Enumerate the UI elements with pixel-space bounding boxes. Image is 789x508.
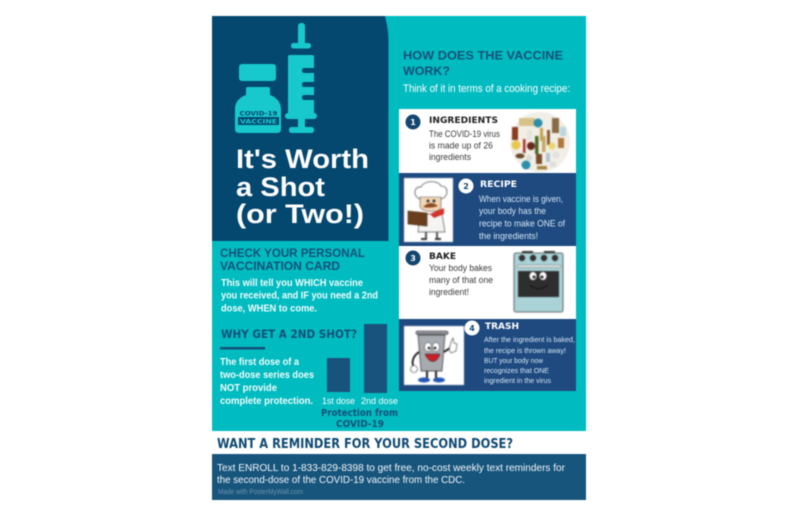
panel: reminder text: Text ENROLL to 1-833-829-8398 to get free, no-cost weekly text reminders for <box>217 462 565 474</box>
step number 1 <box>406 114 420 130</box>
panel: step 3 bake <box>399 246 576 319</box>
bar chart: protection from COVID-19: COVID-19 <box>336 419 384 430</box>
step number 4: 4 <box>469 324 475 333</box>
text block: NOT provide <box>220 382 277 394</box>
icon: vaccine vial: VACCINE <box>240 118 277 126</box>
text block: The first dose of a <box>220 356 299 368</box>
panel: how does the vaccine work heading: Think of it in terms of a cooking recipe: <box>403 83 570 95</box>
panel: step 3 bake: ingredient! <box>429 287 469 297</box>
panel: how does the vaccine work heading: HOW DOES THE VACCINE <box>403 48 563 62</box>
text block: This will tell you WHICH vaccine <box>221 277 363 289</box>
step number 3 <box>406 250 420 266</box>
bar chart: protection from COVID-19: Protection from <box>321 408 398 419</box>
panel: step 3 bake: many of that one <box>429 275 493 285</box>
heading: VACCINATION CARD <box>220 261 340 273</box>
panel: step 2 recipe <box>399 173 576 246</box>
title <box>236 144 369 229</box>
heading: CHECK YOUR PERSONAL <box>220 248 365 260</box>
bar chart: protection from COVID-19: 2nd dose <box>361 396 398 407</box>
bar chart: protection from COVID-19: 1st dose <box>322 396 355 407</box>
image: cartoon trash can <box>404 326 464 385</box>
text block <box>220 356 314 407</box>
panel: step 2 recipe: RECIPE <box>480 180 517 190</box>
panel: step 4 trash <box>399 319 576 391</box>
panel: how does the vaccine work heading: WORK? <box>403 64 450 78</box>
bar chart: protection from COVID-19 <box>321 324 398 430</box>
panel: step 1 ingredients: The COVID-19 virus <box>429 129 501 139</box>
panel: reminder text: Made with PosterMyWall.com <box>218 489 303 496</box>
panel: check vaccination card <box>220 248 378 314</box>
title: It's Worth <box>236 144 369 174</box>
title: (or Two!) <box>236 199 364 229</box>
panel: how does the vaccine work heading <box>403 48 570 95</box>
title: a Shot <box>236 172 325 202</box>
text block: dose, WHEN to come. <box>221 302 317 314</box>
panel: step 4 trash: recognizes that ONE <box>484 366 549 375</box>
panel: step 2 recipe: recipe to make ONE of <box>479 218 566 228</box>
text block <box>221 277 378 314</box>
panel: why get a 2nd shot <box>220 324 398 430</box>
text block: you received, and IF you need a 2nd <box>221 290 378 302</box>
image: chef reading recipe <box>404 178 453 242</box>
step number 3: 3 <box>410 254 416 263</box>
heading <box>220 248 365 273</box>
panel: reminder text <box>212 454 586 500</box>
panel: step 1 ingredients: is made up of 26 <box>429 140 493 150</box>
step number 2 <box>458 178 474 194</box>
text block: complete protection. <box>220 395 313 407</box>
text block: two-dose series does <box>220 369 314 381</box>
panel: step 4 trash: After the ingredient is baked, <box>484 335 575 344</box>
step number 4 <box>464 320 480 336</box>
icon: ingredients circle <box>510 112 570 172</box>
panel: step 2 recipe: your body has the <box>479 206 546 216</box>
panel: step 4 trash: the recipe is thrown away! <box>484 346 566 355</box>
heading: WHY GET A 2ND SHOT? <box>221 327 357 341</box>
panel: step 4 trash: TRASH <box>485 322 519 332</box>
panel: step 1 ingredients <box>399 109 576 173</box>
panel: step 4 trash: BUT your body now <box>484 356 544 365</box>
icon: vaccine vial: COVID-19 <box>240 110 278 118</box>
heading: reminder: WANT A REMINDER FOR YOUR SECOND DOSE? <box>217 436 513 452</box>
step number 2: 2 <box>463 182 469 191</box>
panel: reminder text: the second-dose of the COVID-19 vaccine from the CDC. <box>217 474 465 486</box>
icon: syringe <box>285 23 317 133</box>
icon: smiling oven <box>514 251 563 312</box>
step number 1: 1 <box>410 118 416 127</box>
panel: step 2 recipe: When vaccine is given, <box>479 194 563 204</box>
panel: step 3 bake: Your body bakes <box>429 263 493 273</box>
panel: step 3 bake: BAKE <box>429 252 456 262</box>
panel: step 1 ingredients: INGREDIENTS <box>429 116 498 126</box>
panel: step 1 ingredients: ingredients <box>429 152 472 162</box>
icon: vaccine vial <box>235 64 281 133</box>
panel: title header <box>212 16 388 241</box>
panel: step 2 recipe: the ingredients! <box>479 231 538 241</box>
panel: step 4 trash: ingredient in the virus <box>484 376 551 385</box>
